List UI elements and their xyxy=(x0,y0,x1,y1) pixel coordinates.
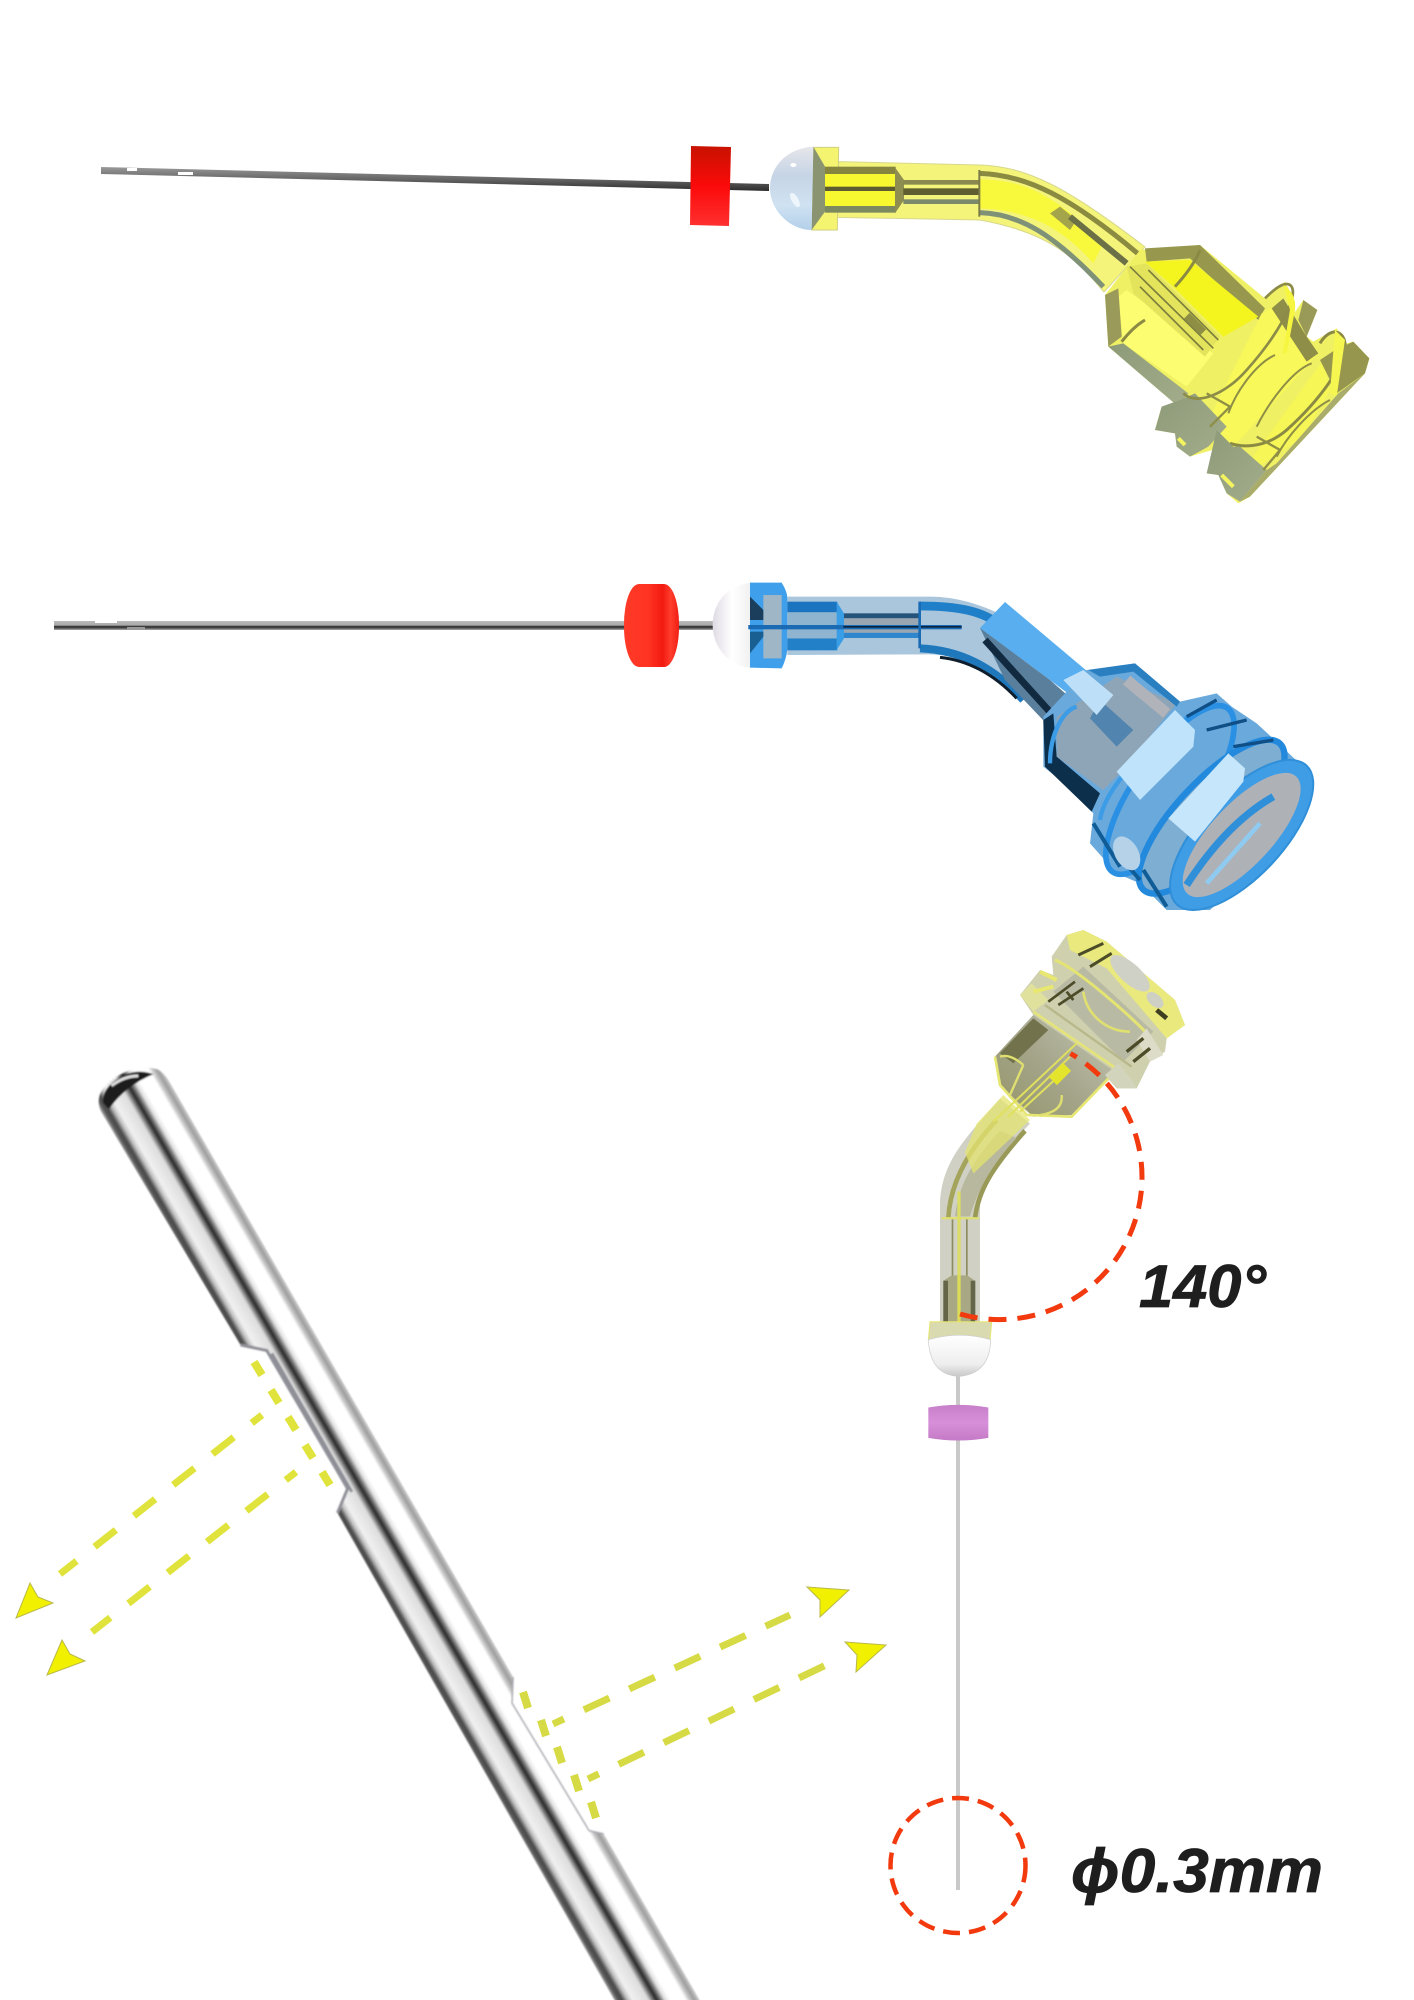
tube, dome and stopper xyxy=(928,1095,1030,1441)
angle arc xyxy=(960,1054,1142,1320)
enlarged steel needle xyxy=(90,1055,700,2000)
blue needle tip assembly xyxy=(54,583,1337,933)
needle shaft xyxy=(54,621,714,630)
tip highlight xyxy=(96,1062,157,1110)
upper stream xyxy=(553,1615,790,1724)
yellow needle tip assembly xyxy=(101,146,1369,503)
flow arrows: left xyxy=(16,1362,330,1675)
exit dots xyxy=(254,1362,330,1485)
yellow tube with silicone dome xyxy=(770,147,1145,292)
arrowhead xyxy=(47,1640,85,1675)
cropped bottom edge xyxy=(1100,911,1320,927)
rib xyxy=(980,602,1113,715)
thin needle xyxy=(956,1375,960,1890)
blue hub with flanges xyxy=(980,602,1337,933)
diameter label: ϕ0.3mm xyxy=(1071,1837,1323,1906)
lower stream xyxy=(92,1472,296,1632)
tip highlight circle xyxy=(890,1798,1026,1933)
yellow hub with flanges xyxy=(1105,245,1369,503)
arrowhead xyxy=(807,1587,849,1617)
red stopper xyxy=(690,146,731,226)
blue tube with silicone dome xyxy=(713,583,1033,700)
upper stream xyxy=(60,1415,262,1574)
yellow hub with flanges xyxy=(993,930,1185,1122)
vertical yellow 140 degree tip xyxy=(890,930,1323,1933)
arrowhead xyxy=(16,1583,53,1618)
lower stream xyxy=(588,1665,826,1779)
exit dots xyxy=(523,1692,596,1818)
flow arrows: right xyxy=(523,1587,886,1818)
notch ledge xyxy=(240,1333,357,1513)
needle shaft xyxy=(101,167,769,191)
opening edge xyxy=(501,1677,604,1841)
angle label: 140° xyxy=(1139,1253,1267,1320)
red stopper xyxy=(624,584,679,667)
arrowhead xyxy=(845,1642,886,1672)
